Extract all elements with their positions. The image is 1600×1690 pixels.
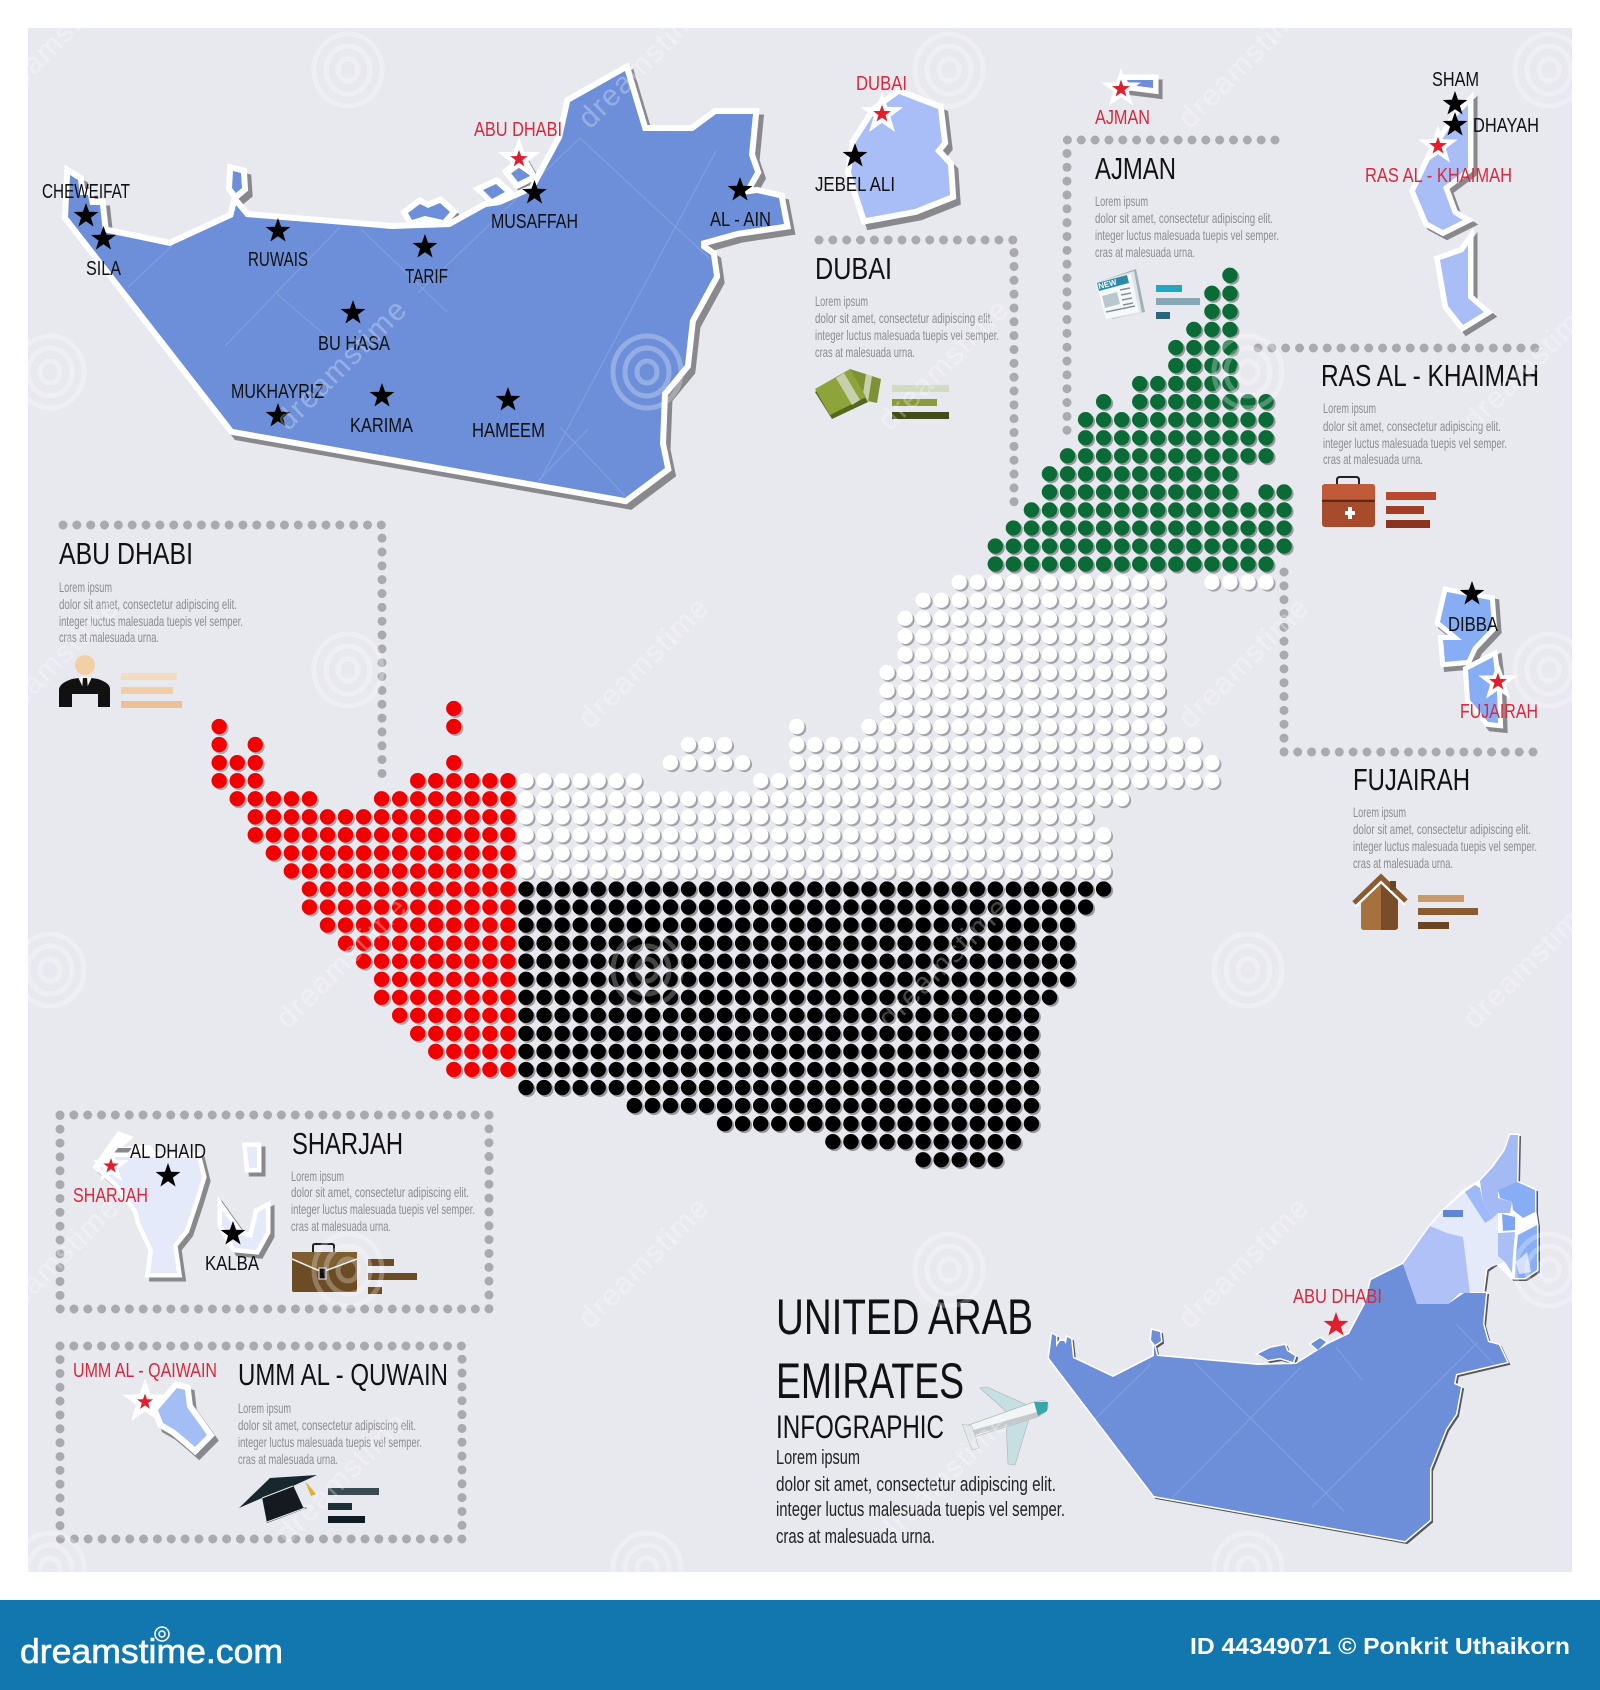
Fujairah	[1498, 1182, 1535, 1218]
text block: Lorem ipsum	[1353, 804, 1406, 820]
text block: cras at malesuada urna.	[815, 344, 915, 360]
intro text	[776, 1447, 1065, 1548]
text block: cras at malesuada urna.	[1323, 451, 1423, 467]
watermark text: dreamstime	[572, 1191, 715, 1335]
watermark text: dreamstime	[270, 891, 413, 1035]
text block	[291, 1168, 475, 1234]
panel: Fujairah info	[1284, 572, 1537, 930]
watermark text: dreamstime	[270, 1406, 413, 1550]
panel: Sharjah map: AL DHAID	[130, 1141, 206, 1163]
text block: dolor sit amet, consectetur adipiscing elit.	[59, 596, 237, 612]
panel: Dubai map: JEBEL ALI	[815, 174, 895, 196]
bars	[1156, 285, 1200, 319]
heading: DUBAI	[815, 251, 892, 286]
icon: airplane	[962, 1387, 1048, 1465]
panel: Dubai info	[815, 240, 1014, 502]
black band	[526, 889, 1104, 1160]
intro text: Lorem ipsum	[776, 1447, 860, 1469]
text block	[1095, 193, 1279, 260]
panel: Sharjah map: KALBA	[205, 1253, 260, 1275]
text block: integer luctus malesuada tuepis vel semper.	[815, 327, 999, 343]
panel: Ras Al Khaimah map: SHAM	[1432, 69, 1479, 91]
icon: graduation cap	[239, 1475, 317, 1523]
panel: Ras Al Khaimah map: RAS AL - KHAIMAH	[1365, 165, 1512, 187]
panel: Ras Al Khaimah info	[1258, 348, 1539, 528]
watermark text: dreamstime	[872, 293, 1015, 437]
city labels: TARIF	[405, 266, 448, 288]
text block: cras at malesuada urna.	[291, 1218, 391, 1234]
panel: UAE title	[776, 1289, 1065, 1548]
bars	[368, 1259, 417, 1294]
heading: AJMAN	[1095, 151, 1176, 186]
city stars	[74, 177, 752, 426]
text block: cras at malesuada urna.	[1095, 244, 1195, 260]
icon: first aid kit	[1322, 477, 1375, 527]
bars	[892, 385, 949, 419]
footer logo: dreamstime.com	[20, 1633, 283, 1671]
title: UNITED ARAB	[776, 1289, 1033, 1345]
watermark text: dreamstime	[1172, 591, 1315, 735]
city labels: MUKHAYRIZ	[231, 381, 324, 403]
bars	[328, 1488, 379, 1523]
text block	[1323, 400, 1507, 467]
footer credit: ID 44349071 © Ponkrit Uthaikorn	[1190, 1633, 1570, 1659]
bars	[1418, 895, 1478, 929]
Umm Al Quwain	[1465, 1185, 1493, 1223]
watermark text: dreamstime	[1457, 891, 1600, 1035]
panel: Ajman map	[1095, 76, 1157, 129]
city labels: KARIMA	[350, 415, 414, 437]
city labels: RUWAIS	[248, 249, 308, 271]
intro text: integer luctus malesuada tuepis vel semper.	[776, 1499, 1065, 1521]
city labels: BU HASA	[318, 333, 391, 355]
heading: ABU DHABI	[59, 536, 193, 571]
heading: RAS AL - KHAIMAH	[1321, 358, 1539, 393]
panel: Abu Dhabi info	[59, 525, 382, 774]
Dubai emirate	[1403, 1226, 1470, 1304]
text block: dolor sit amet, consectetur adipiscing elit.	[815, 310, 993, 326]
watermark text: dreamstime	[270, 293, 413, 437]
eastern exclaves	[1502, 1214, 1515, 1231]
panel: Ras Al Khaimah map: DHAYAH	[1473, 115, 1539, 137]
icon: house	[1354, 877, 1406, 930]
city labels: HAMEEM	[472, 420, 545, 442]
text block: Lorem ipsum	[815, 293, 868, 309]
text block	[238, 1400, 422, 1467]
text block: dolor sit amet, consectetur adipiscing elit.	[1323, 418, 1501, 434]
red band	[219, 708, 508, 1070]
watermark text: dreamstime	[572, 591, 715, 735]
text block: cras at malesuada urna.	[59, 629, 159, 645]
icon: newspaper	[1096, 269, 1145, 319]
capital star	[1324, 1312, 1348, 1336]
watermark text: dreamstime	[872, 1406, 1015, 1550]
Sharjah emirate	[1430, 1192, 1505, 1292]
text block: dolor sit amet, consectetur adipiscing elit.	[238, 1417, 416, 1433]
text block	[1353, 804, 1537, 871]
city labels: MUSAFFAH	[491, 211, 578, 233]
green band	[995, 275, 1284, 564]
dotted flag map of the UAE	[219, 275, 1286, 1162]
icon: businessman	[59, 655, 110, 707]
panel: Umm Al Quwain map: UMM AL - QAIWAIN	[73, 1360, 217, 1382]
icon: newspaper: NEW	[1097, 278, 1118, 291]
text block: integer luctus malesuada tuepis vel semper.	[1323, 435, 1507, 451]
city labels: SILA	[86, 258, 122, 280]
watermark text: dreamstime	[1457, 293, 1600, 437]
white band	[526, 582, 1266, 871]
text block: Lorem ipsum	[59, 579, 112, 595]
panel: Umm Al Quwain info	[60, 1346, 462, 1539]
text block: integer luctus malesuada tuepis vel semper.	[59, 613, 243, 629]
panel: Fujairah map: DIBBA	[1448, 614, 1499, 636]
intro text: cras at malesuada urna.	[776, 1526, 935, 1548]
panel: Umm Al Quwain map	[73, 1360, 217, 1452]
subtitle: INFOGRAPHIC	[776, 1409, 944, 1445]
text block: integer luctus malesuada tuepis vel semper.	[238, 1434, 422, 1450]
footer bar	[0, 1600, 1600, 1690]
watermark text: dreamstime	[1172, 1191, 1315, 1335]
city labels: CHEWEIFAT	[42, 181, 130, 203]
watermark text: dreamstime	[872, 891, 1015, 1035]
Ajman	[1443, 1210, 1463, 1217]
text block: Lorem ipsum	[1323, 400, 1376, 416]
Ras Al Khaimah	[1480, 1135, 1518, 1218]
panel: UAE overview map	[1049, 1135, 1539, 1543]
city labels: AL - AIN	[710, 209, 771, 231]
panel: Ras Al Khaimah map	[1365, 69, 1539, 329]
icon: briefcase	[292, 1244, 357, 1292]
panel: Ajman info	[1067, 140, 1279, 431]
capital label: ABU DHABI	[474, 119, 562, 141]
panel: UAE title: EMIRATES	[776, 1353, 964, 1409]
text block: dolor sit amet, consectetur adipiscing elit.	[291, 1184, 469, 1200]
panel: Dubai map: DUBAI	[856, 73, 907, 95]
text block: Lorem ipsum	[291, 1168, 344, 1184]
bars	[121, 673, 182, 708]
Abu Dhabi emirate	[1049, 1264, 1507, 1541]
text block: integer luctus malesuada tuepis vel semper.	[291, 1201, 475, 1217]
text block: cras at malesuada urna.	[238, 1451, 338, 1467]
panel: Sharjah map	[73, 1131, 270, 1277]
panel: Sharjah info	[60, 1115, 489, 1309]
bars	[1386, 492, 1436, 528]
panel: Fujairah map	[1440, 581, 1538, 727]
panel: Fujairah map: FUJAIRAH	[1460, 701, 1538, 723]
heading: SHARJAH	[292, 1126, 403, 1161]
capital label: ABU DHABI	[1293, 1286, 1382, 1308]
panel: Abu Dhabi map	[42, 71, 789, 504]
text block	[815, 293, 999, 360]
panel: Ajman map: AJMAN	[1095, 107, 1150, 129]
text block: dolor sit amet, consectetur adipiscing elit.	[1095, 210, 1273, 226]
icon: money	[815, 369, 881, 419]
text block: Lorem ipsum	[1095, 193, 1148, 209]
text block	[59, 579, 243, 645]
city labels	[42, 181, 771, 442]
panel: Sharjah map: SHARJAH	[73, 1185, 148, 1207]
panel: Dubai map	[815, 73, 955, 224]
intro text: dolor sit amet, consectetur adipiscing elit.	[776, 1474, 1056, 1496]
heading: UMM AL - QUWAIN	[238, 1357, 448, 1392]
heading: FUJAIRAH	[1353, 762, 1470, 797]
capital star	[510, 150, 528, 166]
text block: integer luctus malesuada tuepis vel semper.	[1095, 227, 1279, 243]
text block: cras at malesuada urna.	[1353, 855, 1453, 871]
text block: Lorem ipsum	[238, 1400, 291, 1416]
logo spiral	[155, 1627, 169, 1641]
